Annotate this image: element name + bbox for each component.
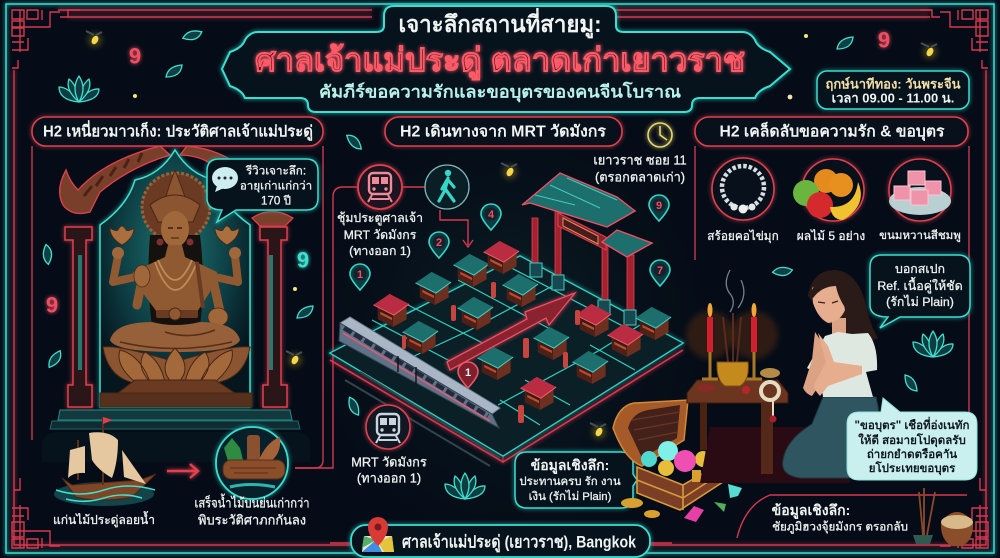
label: soi 11: (ตรอกตลาดเก่า) — [595, 170, 685, 184]
map pins with numbers: 4 — [488, 209, 495, 221]
info bubble: child-seeking belief: ให้ดี สอมายโปดุดลรับ — [858, 432, 966, 448]
label: shrine gate exit: MRT วัดมังกร — [344, 228, 417, 242]
panel: love and child tips — [686, 117, 977, 546]
offering caption: fruit: ผลไม้ 5 อย่าง — [797, 229, 865, 243]
arrow: ship to wood — [167, 464, 198, 478]
heading pill — [32, 117, 323, 146]
incense and rice bowl — [913, 488, 973, 546]
icon: lower MRT circle — [366, 405, 410, 449]
icon: clock — [648, 123, 672, 147]
shrine arch and pillars — [60, 146, 293, 407]
deep info: feng shui: ข้อมูลเชิงลึก: — [772, 502, 850, 519]
offering caption: sweets: ขนมหวานสีชมพู — [879, 229, 961, 242]
speech bubble: tell your spec: (รักไม่ Plain) — [886, 295, 954, 309]
info box: auspicious time: เวลา 09.00 - 11.00 น. — [832, 90, 954, 106]
label: soi 11 — [593, 152, 687, 184]
info box: auspicious time: ฤกษ์นาทีทอง: วันพระจีน — [826, 76, 961, 92]
floor — [700, 427, 850, 483]
speech bubble: tell your spec: บอกสเปก — [895, 262, 945, 276]
location pill — [330, 517, 672, 557]
callout: insight blessings: เงิน (รักไม่ Plain) — [529, 490, 612, 503]
hair back — [808, 270, 878, 345]
info bubble: child-seeking belief: "ขอบุตร" เชือที่อ่งเนทัก — [855, 416, 969, 433]
eyes — [818, 301, 838, 303]
speech bubble: in-depth review: รีวิวเจาะลึก: — [245, 164, 306, 178]
callout: insight blessings: ประทานครบ รัก งาน — [519, 476, 621, 488]
t-shirt — [807, 332, 877, 397]
hair fringe — [809, 274, 848, 312]
label: MRT exit — [351, 454, 427, 486]
heading pill — [385, 117, 622, 146]
icon: wooden ship — [54, 417, 156, 506]
panel: history — [32, 117, 323, 528]
arms and hands — [803, 332, 830, 396]
deep info: feng shui — [737, 495, 967, 538]
map pins with numbers: 9 — [656, 200, 662, 212]
MRT train — [339, 317, 500, 466]
label: soi 11: เยาวราช ซอย 11 — [593, 152, 687, 168]
map pins with numbers: 1 — [465, 367, 471, 379]
decorative nine numerals — [46, 28, 890, 318]
location pill: ศาลเจ้าแม่ประดู่ (เยาวราช), Bangkok — [402, 532, 636, 554]
market stalls — [373, 241, 671, 410]
map platform — [330, 256, 683, 463]
label: shrine gate exit — [337, 211, 423, 258]
speech bubble: in-depth review: 170 ปี — [261, 194, 291, 208]
offering caption: necklace: สร้อยคอไข่มุก — [707, 229, 779, 243]
ship caption: แก่นไม้ประดู่ลอยน้ำ — [53, 511, 155, 528]
heading pill: H2 เคล็ดลับขอความรัก & ขอบุตร — [720, 120, 945, 142]
treasure chest — [613, 400, 742, 522]
heading pill — [695, 117, 968, 146]
speech bubble: in-depth review — [207, 159, 318, 222]
deep info: feng shui: ชัยภูมิฮวงจุ้ยมังกร ตรอกลับ — [772, 520, 908, 534]
main title: ศาลเจ้าแม่ประดู่ ตลาดเก่าเยาวราช — [255, 42, 745, 81]
neck — [832, 318, 846, 336]
map pins with numbers: 7 — [657, 265, 663, 277]
info bubble: child-seeking belief: ถ่ายกยำดตรือคาัน — [867, 447, 957, 461]
route connector lines — [295, 187, 473, 468]
subtitle: คัมภีร์ขอความรักและขอบุตรของคนจีนโบราณ — [319, 82, 681, 102]
map streets — [330, 256, 683, 456]
face — [812, 283, 845, 323]
wooden goddess statue — [110, 170, 241, 352]
speech bubble: tell your spec: Ref. เนื้อคู่ให้ชัด — [877, 277, 963, 294]
speech bubble: tell your spec — [870, 255, 970, 328]
altar table with offerings — [686, 270, 788, 474]
lotus throne — [100, 347, 252, 407]
decorative nine numerals: 9 — [46, 292, 58, 318]
jeans — [783, 397, 881, 478]
callout: insight blessings: ข้อมูลเชิงลึก: — [531, 457, 609, 474]
map pins with numbers: 1 — [357, 269, 363, 281]
info box: auspicious time — [817, 71, 969, 109]
info bubble: child-seeking belief: ยโประเทยขอบุตร — [869, 460, 956, 476]
map pins with numbers: 2 — [436, 237, 442, 249]
offering: five fruits — [793, 159, 864, 221]
map pins with numbers — [350, 195, 670, 388]
heading pill: H2 เหนี่ยวมาวเก็ง: ประวัติศาลเจ้าแม่ประดู่ — [43, 120, 313, 142]
stone steps — [42, 410, 310, 462]
title line 1: เจาะลึกสถานที่สายมู: — [398, 7, 602, 39]
praying woman — [783, 270, 881, 478]
speech bubble: in-depth review: อายุเก่าแก่กว่า — [240, 180, 312, 192]
icon: walking person — [425, 165, 469, 209]
label: MRT exit: MRT วัดมังกร — [351, 454, 427, 470]
small market people — [402, 282, 580, 423]
wood caption — [194, 494, 310, 528]
decorative nine numerals: 9 — [129, 44, 141, 68]
icon: chat bubble — [212, 167, 238, 192]
callout: insight blessings — [515, 452, 637, 508]
panel frame — [695, 146, 969, 415]
title plaque — [222, 6, 790, 112]
isometric market map — [330, 173, 683, 466]
offering: pink sweets — [889, 159, 951, 221]
label: shrine gate exit: ชุ้มประตูศาลเจ้า — [337, 211, 423, 226]
panel frame and connector — [32, 146, 323, 468]
decorative nine numerals: 9 — [297, 248, 309, 272]
decorative fireflies, leaves and lotuses — [38, 27, 953, 499]
teal niche — [100, 150, 250, 407]
heading pill: H2 เดินทางจาก MRT วัดมังกร — [400, 122, 607, 140]
offering: pearl necklace — [712, 158, 774, 220]
label: MRT exit: (ทางออก 1) — [357, 470, 421, 486]
info bubble: child-seeking belief — [847, 398, 977, 480]
label: shrine gate exit: (ทางออก 1) — [349, 244, 411, 258]
panel: route from MRT — [295, 117, 742, 557]
decorative nine numerals: 9 — [878, 28, 890, 52]
wood caption: พิบระวัติศาภกกันลง — [198, 512, 306, 528]
icon: wood and leaves circle — [216, 427, 288, 499]
Chinese gate — [522, 173, 652, 325]
red arrow route — [447, 293, 575, 370]
wood caption: เสร็จน้ำไม้บนย่นเก่ากว่า — [194, 494, 310, 510]
icon: map pin — [362, 517, 394, 552]
icon: MRT train circle — [358, 165, 402, 209]
